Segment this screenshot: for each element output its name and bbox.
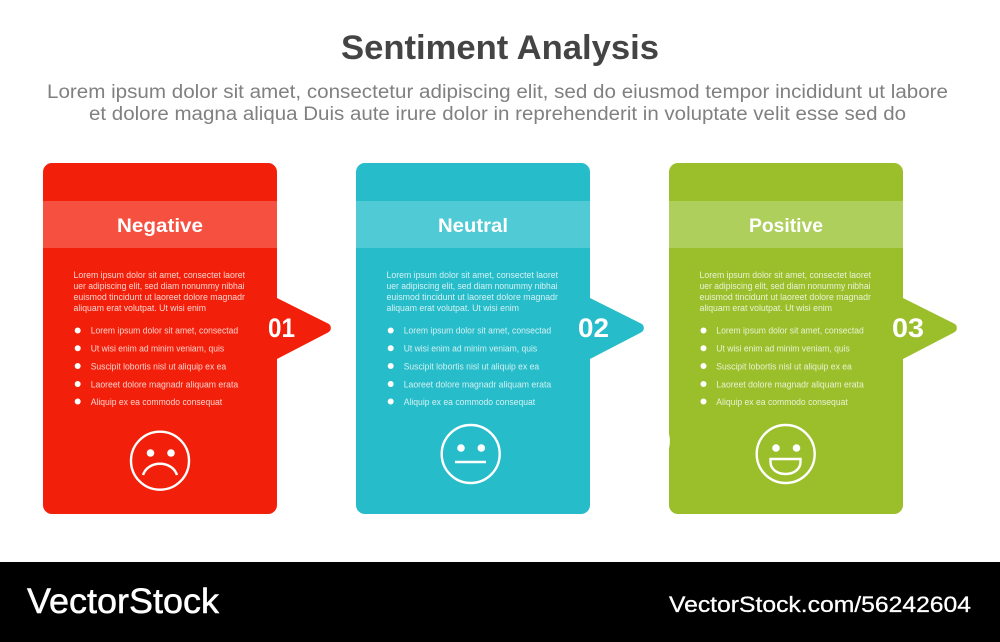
card with arrow: neutral: [356, 163, 644, 514]
subtitle text block: Lorem ipsum dolor sit amet, consectetur adipiscing elit, sed do eiusmod tempor incididunt ut labore: [47, 82, 948, 103]
paragraph: neutral: [386, 270, 559, 314]
bullet list: negative: Aliquip ex ea commodo consequat: [91, 397, 222, 408]
paragraph: positive: Lorem ipsum dolor sit amet, consectet laoret: [700, 270, 871, 281]
bullet list: negative: Ut wisi enim ad minim veniam, quis: [91, 344, 224, 354]
bullet list: positive: Ut wisi enim ad minim veniam, quis: [716, 344, 850, 354]
icon: sad face: [131, 432, 189, 490]
bullet list: neutral: Lorem ipsum dolor sit amet, consectad: [404, 326, 551, 336]
subtitle text block: et dolore magna aliqua Duis aute irure dolor in reprehenderit in voluptate velit esse sed do: [89, 104, 906, 125]
paragraph: negative: [74, 270, 246, 314]
heading: neutral: Neutral: [438, 216, 508, 237]
panel: neutral: [356, 163, 644, 514]
header band: positive: [669, 201, 903, 248]
number 03: 03: [892, 313, 924, 343]
paragraph: negative: uer adipiscing elit, sed diam nonummy nibhai: [74, 281, 244, 292]
bullet list: positive: Suscipit lobortis nisl ut aliquip ex ea: [716, 362, 852, 372]
paragraph: positive: uer adipiscing elit, sed diam nonummy nibhai: [700, 281, 870, 292]
bullet list: positive: Laoreet dolore magnadr aliquam erata: [716, 379, 864, 390]
paragraph: neutral: euismod tincidunt ut laoreet dolore magnadr: [386, 292, 559, 303]
number 01: 01: [268, 313, 295, 343]
footer url text: VectorStock.com/56242604: [669, 592, 971, 617]
card with arrow: negative: [43, 163, 331, 514]
bullet list: negative: [75, 326, 239, 408]
heading: negative: Negative: [117, 216, 203, 237]
card with arrow: positive: [669, 163, 957, 514]
footer logo text: VectorStock: [27, 582, 220, 621]
watermark footer bar: [0, 562, 1000, 642]
heading: positive: Positive: [749, 216, 823, 237]
bullet list: neutral: Suscipit lobortis nisl ut aliquip ex ea: [404, 362, 540, 372]
paragraph: negative: aliquam erat volutpat. Ut wisi enim: [74, 303, 206, 314]
title: Sentiment Analysis: [341, 29, 659, 67]
paragraph: neutral: uer adipiscing elit, sed diam nonummy nibhai: [386, 281, 558, 292]
bullet list: neutral: Laoreet dolore magnadr aliquam erata: [404, 379, 552, 390]
bullet list: positive: [700, 326, 864, 408]
paragraph: positive: euismod tincidunt ut laoreet dolore magnadr: [700, 292, 872, 303]
number 02: 02: [578, 313, 609, 343]
bullet list: neutral: [388, 326, 552, 408]
bullet list: neutral: Ut wisi enim ad minim veniam, quis: [404, 344, 537, 354]
subtitle text block: [47, 82, 948, 125]
panel: positive: [668, 163, 957, 514]
bullet list: negative: Lorem ipsum dolor sit amet, consectad: [91, 326, 238, 336]
paragraph: positive: aliquam erat volutpat. Ut wisi enim: [700, 303, 832, 314]
paragraph: positive: [700, 270, 872, 314]
paragraph: negative: Lorem ipsum dolor sit amet, consectet laoret: [74, 270, 245, 281]
bullet list: negative: Laoreet dolore magnadr aliquam erata: [91, 379, 239, 390]
panel: negative: [43, 163, 331, 514]
paragraph: negative: euismod tincidunt ut laoreet dolore magnadr: [74, 292, 246, 303]
header band: neutral: [356, 201, 590, 248]
icon: happy face: [757, 425, 815, 483]
icon: neutral face: [442, 425, 500, 483]
card edge notch: [668, 430, 670, 451]
bullet list: neutral: Aliquip ex ea commodo consequat: [404, 397, 535, 408]
bullet list: positive: Lorem ipsum dolor sit amet, consectad: [716, 326, 864, 336]
header band: negative: [43, 201, 277, 248]
bullet list: positive: Aliquip ex ea commodo consequat: [716, 397, 848, 408]
paragraph: neutral: Lorem ipsum dolor sit amet, consectet laoret: [386, 270, 558, 281]
paragraph: neutral: aliquam erat volutpat. Ut wisi enim: [386, 303, 519, 314]
bullet list: negative: Suscipit lobortis nisl ut aliquip ex ea: [91, 362, 227, 372]
